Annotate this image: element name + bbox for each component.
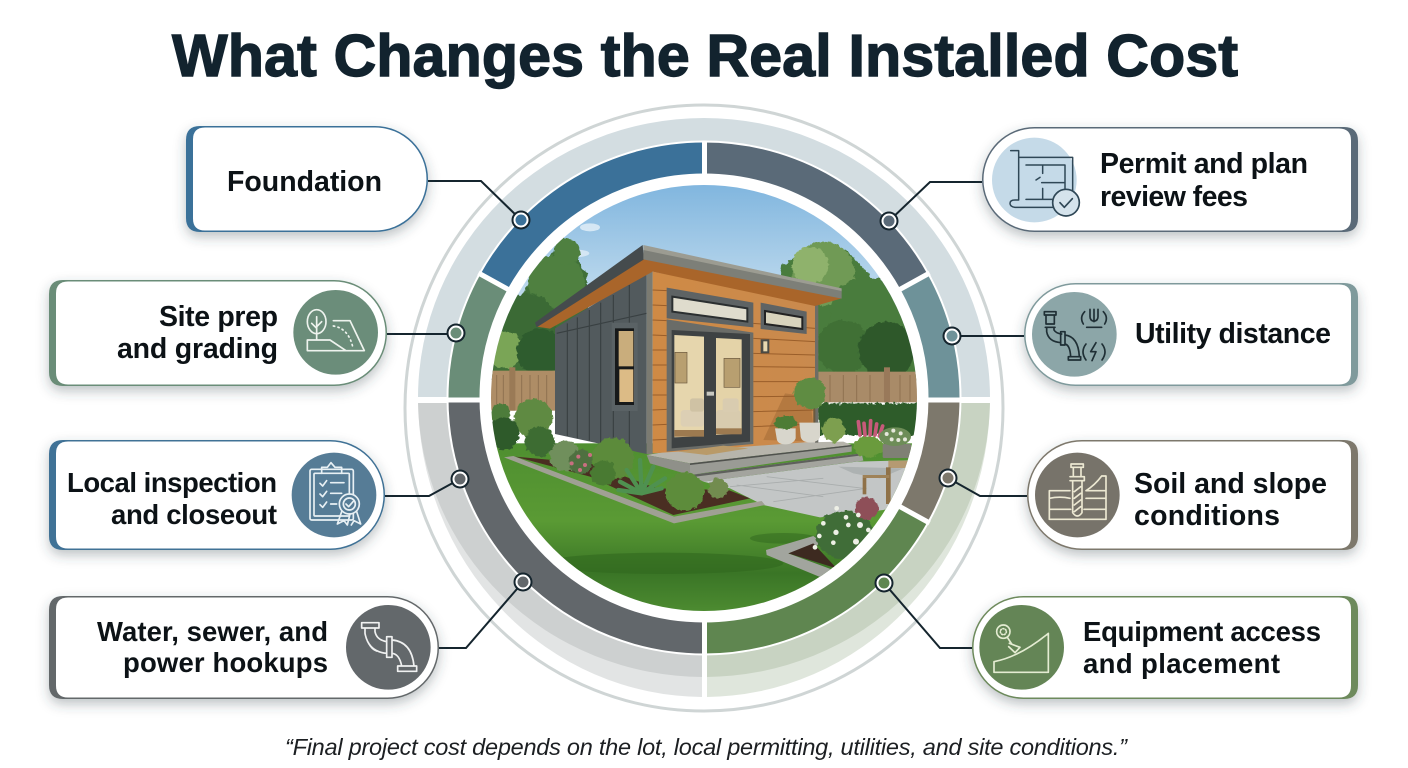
central photo: backyard studio shed — [487, 173, 925, 617]
icon: excavator on slope — [979, 605, 1064, 690]
label: permit and plan: Permit and plan — [1100, 148, 1308, 180]
label: utility distance: Utility distance — [1135, 318, 1331, 350]
node: hookups — [514, 572, 532, 592]
wall lamp — [761, 339, 769, 353]
pale upper ring band — [418, 118, 990, 397]
title: What Changes the Real Installed Cost — [172, 23, 1238, 89]
node: utility — [942, 326, 962, 346]
connector: soil — [948, 478, 1027, 496]
connector: permit — [889, 182, 982, 221]
segment: equipment access — [704, 514, 914, 638]
pale lower left ring band — [418, 403, 702, 697]
door mat — [678, 446, 748, 455]
bench — [863, 461, 912, 504]
label: equipment access: and placement — [1083, 648, 1280, 679]
icon: blueprint with check — [992, 138, 1079, 222]
connector: foundation — [428, 181, 521, 220]
icon: soil drill — [1035, 453, 1120, 537]
connector: hookups — [439, 582, 523, 648]
card: utility distance — [1024, 283, 1358, 386]
roof — [537, 258, 842, 329]
shed wood wall — [653, 272, 815, 453]
label: foundation: Foundation — [227, 166, 382, 198]
connector: site prep — [387, 333, 456, 335]
label: site prep: and grading — [117, 333, 278, 365]
label: soil and slope: Soil and slope — [1134, 468, 1327, 500]
connector: local inspection — [385, 479, 460, 496]
segment: utility distance — [914, 282, 944, 398]
node: local inspection — [450, 470, 470, 488]
card: site prep and grading — [49, 280, 387, 386]
label: water, sewer, hookups: power hookups — [123, 647, 328, 678]
connector: equipment — [884, 583, 972, 648]
node: permit — [880, 212, 898, 230]
outer thin ring — [405, 105, 1003, 711]
icon: pipe — [346, 605, 431, 690]
label: site prep: Site prep — [159, 301, 278, 333]
icon: tree and graded slope — [293, 290, 378, 375]
label: local inspection: and closeout — [111, 499, 277, 530]
label: permit and plan: review fees — [1100, 181, 1248, 213]
segment: site prep — [464, 282, 494, 398]
card: permit and plan review fees — [982, 127, 1358, 232]
label: equipment access: Equipment access — [1083, 616, 1321, 647]
node: soil — [938, 468, 958, 488]
card: water, sewer, and power hookups — [49, 596, 439, 699]
shed left wall — [555, 272, 647, 454]
label: water, sewer, hookups: Water, sewer, and — [97, 616, 328, 647]
card: soil and slope conditions — [1027, 440, 1358, 550]
node: site prep — [446, 324, 466, 342]
label: local inspection: Local inspection — [67, 467, 277, 498]
node: foundation — [512, 210, 530, 230]
icon: clipboard with badge — [292, 453, 376, 537]
circular ring diagram — [405, 99, 1003, 711]
transom window — [667, 288, 753, 327]
glass door — [667, 319, 753, 452]
potted plants — [774, 377, 911, 458]
garden bed — [504, 438, 765, 523]
card: equipment access and placement — [972, 596, 1358, 699]
label: soil and slope: conditions — [1134, 500, 1280, 532]
node: equipment — [874, 574, 894, 592]
connector: utility — [952, 335, 1024, 337]
card: foundation — [186, 126, 428, 232]
pale lower right ring band — [707, 403, 990, 697]
left window — [612, 322, 630, 411]
segment: permit — [704, 158, 914, 282]
footnote quote: “Final project cost depends on the lot, local permitting, utilities, and site conditions.” — [285, 734, 1128, 760]
icon: pipe, plug and power — [1032, 292, 1117, 377]
segment: inspection and hookups — [464, 398, 704, 638]
segment: foundation — [494, 158, 704, 282]
segment: soil and slope — [914, 398, 944, 514]
card: local inspection and closeout — [49, 440, 385, 550]
flower planter — [766, 497, 878, 578]
